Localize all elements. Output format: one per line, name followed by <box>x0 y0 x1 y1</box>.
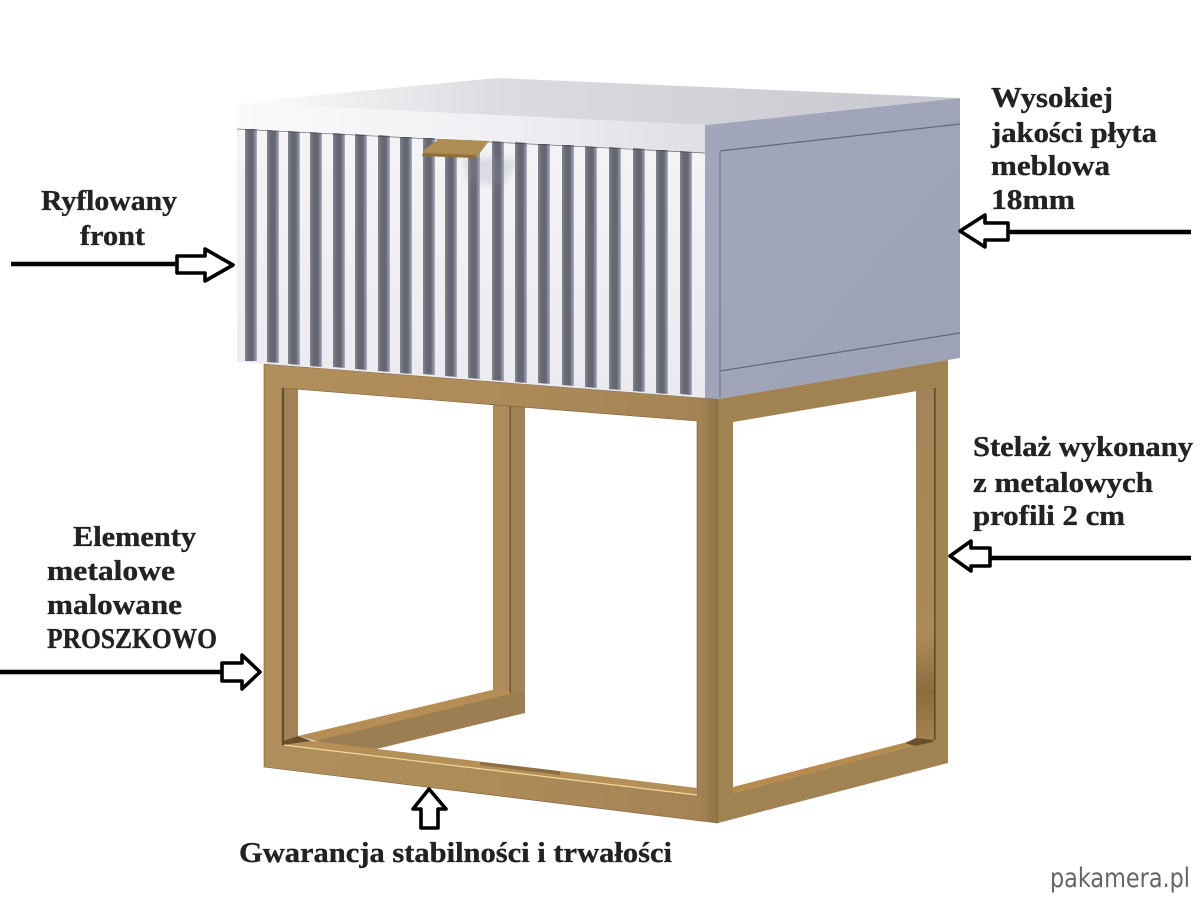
arrow: frame <box>950 541 1191 571</box>
label: powder coating: PROSZKOWO <box>47 624 217 655</box>
metal frame: right face <box>718 360 948 823</box>
label: board: jakości płyta <box>990 118 1157 149</box>
label: frame: z metalowych <box>973 468 1153 499</box>
metal frame: back post <box>493 400 525 716</box>
label: powder coating: Elementy <box>73 522 196 553</box>
label: frame: profili 2 cm <box>973 501 1125 532</box>
label: powder coating: malowane <box>47 590 182 621</box>
nightstand illustration <box>237 78 960 823</box>
cabinet: right side panel <box>705 98 960 399</box>
label: fluted front: front <box>80 221 146 252</box>
metal frame: right bottom rail top face <box>733 738 935 793</box>
label: fluted front: Ryflowany <box>41 186 177 217</box>
label: stability: Gwarancja stabilności i trwałości <box>239 838 672 869</box>
cabinet: top front edge <box>237 103 705 153</box>
label: board: 18mm <box>991 185 1075 216</box>
drawer: brass handle <box>422 139 489 158</box>
drawer: fluted front <box>237 129 705 398</box>
arrow: board <box>960 215 1191 247</box>
arrow: stability <box>413 789 446 828</box>
cabinet: top surface <box>237 78 960 125</box>
label: frame: Stelaż wykonany <box>973 432 1193 463</box>
arrow: fluted front <box>11 249 233 281</box>
label: board: Wysokiej <box>991 83 1113 114</box>
label: board: meblowa <box>991 151 1110 182</box>
metal frame: right post inner face <box>916 388 934 745</box>
label: powder coating: metalowe <box>47 556 175 587</box>
metal frame: front face <box>264 364 718 823</box>
metal frame: back bottom rail <box>298 690 525 750</box>
metal frame: front bottom rail top face <box>284 741 697 795</box>
arrow: powder coating <box>0 655 260 689</box>
metal frame: left post inner face <box>282 388 312 746</box>
